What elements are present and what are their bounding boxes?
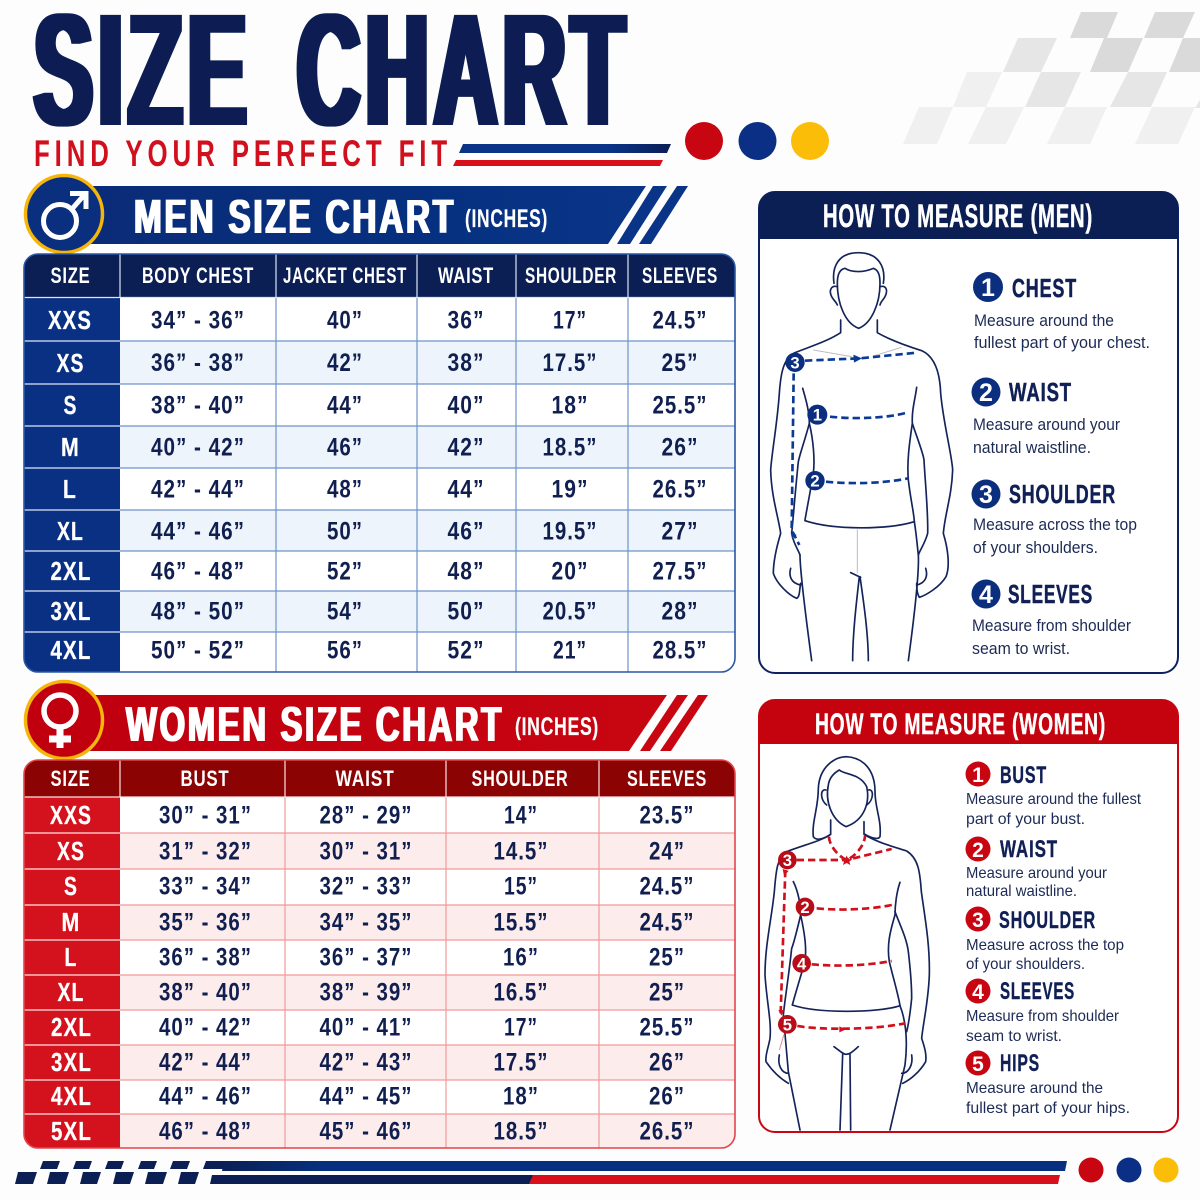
- row: men XS: [56, 348, 698, 378]
- row: men S: 40”: [448, 392, 484, 420]
- row: women XXS: 23.5”: [640, 802, 694, 830]
- row: women 2XL: 25.5”: [640, 1014, 694, 1042]
- step: hips: fullest part of your hips.: [966, 1100, 1130, 1117]
- step: sleeves: seam to wrist.: [966, 1028, 1062, 1045]
- table header: women: SIZE: [50, 766, 90, 791]
- figure: male body diagram: [771, 253, 953, 661]
- row: men M: 46”: [327, 434, 363, 462]
- row: women S: S: [64, 871, 78, 901]
- row: women XL: [58, 977, 685, 1007]
- row: men XXS: 36”: [448, 306, 484, 334]
- row: women M: 15.5”: [494, 908, 548, 936]
- row: men 4XL: 52”: [448, 636, 484, 664]
- row: men 4XL: 50” - 52”: [151, 636, 245, 664]
- row: men 2XL: 48”: [448, 558, 484, 586]
- row: men 4XL: 4XL: [50, 635, 92, 665]
- row: women 5XL: 45” - 46”: [320, 1118, 412, 1146]
- row: women L: L: [64, 942, 78, 972]
- step: waist: [972, 377, 1120, 457]
- row: women XXS: 30” - 31”: [159, 802, 252, 830]
- row: women 4XL: 44” - 45”: [320, 1082, 412, 1110]
- step: sleeves: [972, 579, 1131, 658]
- step: sleeves: Measure from shoulder: [966, 1008, 1120, 1025]
- step: chest: CHEST: [1012, 273, 1077, 303]
- row: women XS: XS: [57, 836, 85, 866]
- step: shoulder: SHOULDER: [1009, 479, 1116, 509]
- step: waist: [966, 836, 1108, 900]
- row: women M: 24.5”: [640, 908, 694, 936]
- row: women XL: XL: [58, 977, 84, 1007]
- row: women XL: 25”: [649, 978, 685, 1006]
- figure: male body diagram: 2: [810, 472, 820, 491]
- row: men L: L: [63, 474, 77, 504]
- row: men S: 18”: [552, 392, 588, 420]
- row: men M: 26”: [662, 434, 698, 462]
- row: men 2XL: [50, 556, 708, 586]
- panel: how to measure men: [759, 192, 1178, 673]
- row: women XXS: 14”: [504, 802, 538, 830]
- step: sleeves: [966, 978, 1120, 1045]
- figure: female body diagram: 4: [797, 954, 807, 973]
- row: women L: 36” - 38”: [159, 944, 252, 972]
- row: women 4XL: 26”: [649, 1082, 685, 1110]
- row: men XL: [57, 516, 698, 546]
- row: men 3XL: 28”: [662, 598, 698, 626]
- footer dots: [1078, 1158, 1178, 1182]
- row: women S: [64, 871, 694, 901]
- row: women XS: 31” - 32”: [159, 838, 252, 866]
- row: women XL: 38” - 40”: [159, 978, 252, 1006]
- row: women 5XL: [51, 1116, 694, 1146]
- table header: men: SHOULDER: [525, 263, 617, 288]
- row: women 4XL: 44” - 46”: [159, 1082, 252, 1110]
- table: men sizes: [24, 254, 735, 672]
- step: sleeves: Measure from shoulder: [972, 616, 1131, 635]
- icon: female symbol: [26, 682, 102, 758]
- row: men 3XL: 3XL: [50, 596, 92, 626]
- row: women XL: 38” - 39”: [320, 978, 412, 1006]
- row: women XXS: 28” - 29”: [320, 802, 412, 830]
- row: women XXS: XXS: [50, 800, 92, 830]
- figure: female body diagram: 5: [783, 1015, 792, 1034]
- row: women 2XL: 17”: [504, 1014, 538, 1042]
- step: waist: natural waistline.: [966, 883, 1077, 900]
- step: waist: 2: [979, 379, 993, 407]
- row: men 4XL: 56”: [327, 636, 363, 664]
- step: shoulder: of your shoulders.: [966, 956, 1085, 973]
- row: women S: 33” - 34”: [159, 872, 252, 900]
- row: men S: 38” - 40”: [151, 392, 245, 420]
- row: men XXS: 34” - 36”: [151, 306, 245, 334]
- row: men XS: 25”: [662, 349, 698, 377]
- row: women 5XL: 26.5”: [640, 1118, 694, 1146]
- row: women 2XL: 2XL: [51, 1012, 92, 1042]
- row: women M: 34” - 35”: [320, 908, 412, 936]
- step: waist: WAIST: [1000, 836, 1058, 863]
- table header: men: JACKET CHEST: [283, 263, 407, 288]
- step: waist: 2: [972, 839, 984, 862]
- table header: men: SLEEVES: [642, 263, 718, 288]
- row: men 2XL: 46” - 48”: [151, 558, 245, 586]
- row: men 2XL: 52”: [327, 558, 363, 586]
- row: women XS: 30” - 31”: [320, 838, 412, 866]
- figure: male body diagram: 1: [813, 406, 822, 425]
- row: men XL: 27”: [662, 518, 698, 546]
- color dots: [685, 122, 829, 160]
- row: women M: M: [62, 907, 80, 937]
- row: men 2XL: 27.5”: [652, 558, 708, 586]
- step: shoulder: Measure across the top: [966, 937, 1124, 954]
- row: women L: 25”: [649, 944, 685, 972]
- row: men XL: 46”: [448, 518, 484, 546]
- row: women 4XL: 18”: [503, 1082, 539, 1110]
- row: men S: 25.5”: [652, 392, 708, 420]
- table header: men: WAIST: [438, 263, 494, 288]
- row: women M: 35” - 36”: [159, 908, 252, 936]
- row: women XS: 14.5”: [494, 838, 548, 866]
- row: men L: 26.5”: [652, 476, 708, 504]
- row: men M: 40” - 42”: [151, 434, 245, 462]
- subtitle: FIND YOUR PERFECT FIT: [34, 133, 452, 174]
- title: [34, 0, 630, 159]
- row: men XS: XS: [56, 348, 84, 378]
- row: men M: [61, 432, 698, 462]
- row: women 3XL: [51, 1047, 685, 1077]
- row: men XL: 50”: [327, 518, 363, 546]
- row: men L: 48”: [327, 476, 363, 504]
- panel: how to measure women: [759, 700, 1178, 1132]
- row: men 3XL: [50, 596, 698, 626]
- row: women 5XL: 5XL: [51, 1116, 92, 1146]
- row: men 3XL: 50”: [448, 598, 484, 626]
- row: men XL: XL: [57, 516, 84, 546]
- row: women 2XL: 40” - 42”: [159, 1014, 252, 1042]
- step: sleeves: seam to wrist.: [972, 639, 1070, 658]
- note: inches: (INCHES): [515, 713, 599, 741]
- icon: male symbol: [26, 176, 102, 252]
- table header: women: BUST: [180, 766, 230, 791]
- row: men XXS: XXS: [48, 305, 92, 335]
- row: men L: 44”: [448, 476, 484, 504]
- subtitle stripes: [453, 144, 671, 166]
- row: women 3XL: 42” - 43”: [320, 1048, 412, 1076]
- step: bust: [966, 762, 1142, 828]
- row: women 3XL: 3XL: [51, 1047, 92, 1077]
- row: women 5XL: 18.5”: [494, 1118, 548, 1146]
- row: women 4XL: 4XL: [51, 1081, 92, 1111]
- row: men XL: 19.5”: [542, 518, 598, 546]
- row: women L: [64, 942, 685, 972]
- footer stripes: [15, 1161, 1067, 1184]
- step: waist: natural waistline.: [973, 438, 1091, 457]
- row: women XXS: [50, 800, 694, 830]
- figure: female body diagram: 3: [783, 851, 792, 870]
- row: women 5XL: 46” - 48”: [159, 1118, 252, 1146]
- step: shoulder: [966, 906, 1124, 973]
- figure: male body diagram: 3: [790, 353, 800, 372]
- step: hips: Measure around the: [966, 1080, 1103, 1097]
- row: women 2XL: [51, 1012, 694, 1042]
- row: men L: 19”: [552, 476, 588, 504]
- row: men XXS: 17”: [553, 306, 587, 334]
- figure: female body diagram: [765, 757, 929, 1130]
- row: men S: 44”: [327, 392, 363, 420]
- row: women 3XL: 17.5”: [494, 1048, 548, 1076]
- row: men 3XL: 20.5”: [542, 598, 598, 626]
- banner: men size chart: [26, 176, 688, 252]
- row: women XS: 24”: [649, 838, 685, 866]
- row: men M: 42”: [448, 434, 484, 462]
- row: women XS: [57, 836, 685, 866]
- figure: female body diagram: 2: [800, 898, 810, 917]
- table header: women: SHOULDER: [472, 766, 568, 791]
- step: shoulder: 3: [979, 481, 993, 509]
- row: men 3XL: 54”: [327, 598, 363, 626]
- row: men XS: 17.5”: [542, 349, 598, 377]
- step: bust: BUST: [1000, 762, 1047, 789]
- row: men XXS: [48, 305, 708, 335]
- step: shoulder: SHOULDER: [999, 907, 1096, 934]
- heading: men size chart: MEN SIZE CHART: [134, 191, 456, 244]
- row: men XS: 38”: [448, 349, 484, 377]
- row: women 3XL: 42” - 44”: [159, 1048, 252, 1076]
- row: men 2XL: 20”: [552, 558, 588, 586]
- row: men L: 42” - 44”: [151, 476, 245, 504]
- row: men L: [63, 474, 708, 504]
- step: chest: 1: [981, 274, 995, 302]
- row: women S: 24.5”: [640, 872, 694, 900]
- row: women S: 15”: [504, 872, 538, 900]
- step: hips: HIPS: [1000, 1050, 1040, 1077]
- row: men 4XL: 28.5”: [652, 636, 708, 664]
- table header: men: SIZE: [50, 263, 90, 288]
- row: women 3XL: 26”: [649, 1048, 685, 1076]
- row: women 4XL: [51, 1081, 685, 1111]
- step: waist: Measure around your: [973, 415, 1120, 434]
- checkered flag decoration: [903, 12, 1200, 144]
- row: men M: 18.5”: [542, 434, 598, 462]
- heading: women size chart: WOMEN SIZE CHART: [126, 698, 504, 752]
- step: waist: Measure around your: [966, 865, 1108, 882]
- row: women S: 32” - 33”: [320, 872, 412, 900]
- row: men 2XL: 2XL: [50, 556, 92, 586]
- banner: women size chart: [26, 682, 708, 758]
- row: men XS: 42”: [327, 349, 363, 377]
- row: women L: 16”: [503, 944, 539, 972]
- row: men XXS: 40”: [327, 306, 363, 334]
- table: women sizes: [24, 760, 735, 1148]
- row: men 4XL: 21”: [553, 636, 587, 664]
- step: chest: fullest part of your chest.: [974, 333, 1150, 352]
- table header: women: [50, 766, 707, 791]
- step: shoulder: [972, 479, 1137, 557]
- step: shoulder: Measure across the top: [973, 515, 1137, 534]
- step: hips: [966, 1050, 1130, 1117]
- row: men S: S: [64, 390, 78, 420]
- step: bust: 1: [972, 764, 984, 787]
- step: waist: WAIST: [1009, 377, 1072, 407]
- step: sleeves: 4: [979, 581, 993, 609]
- row: women 2XL: 40” - 41”: [320, 1014, 412, 1042]
- row: men S: [64, 390, 708, 420]
- step: bust: part of your bust.: [966, 811, 1085, 828]
- row: women M: [62, 907, 694, 937]
- step: chest: [973, 272, 1150, 352]
- table header: men: [50, 263, 718, 288]
- row: men 4XL: [50, 635, 708, 665]
- table header: women: SLEEVES: [627, 766, 707, 791]
- step: shoulder: 3: [972, 909, 984, 932]
- row: men 3XL: 48” - 50”: [151, 598, 245, 626]
- row: men XXS: 24.5”: [652, 306, 708, 334]
- row: women XL: 16.5”: [494, 978, 548, 1006]
- step: sleeves: SLEEVES: [1000, 978, 1075, 1005]
- table header: women: WAIST: [336, 766, 394, 791]
- table header: men: BODY CHEST: [142, 263, 254, 288]
- note: inches: (INCHES): [465, 205, 548, 233]
- row: men XL: 44” - 46”: [151, 518, 245, 546]
- step: sleeves: SLEEVES: [1008, 579, 1093, 609]
- step: hips: 5: [972, 1053, 984, 1076]
- step: sleeves: 4: [972, 981, 984, 1004]
- row: women L: 36” - 37”: [320, 944, 412, 972]
- step: bust: Measure around the fullest: [966, 791, 1142, 808]
- step: chest: Measure around the: [974, 311, 1114, 330]
- row: men XS: 36” - 38”: [151, 349, 245, 377]
- row: men M: M: [61, 432, 80, 462]
- step: shoulder: of your shoulders.: [973, 538, 1098, 557]
